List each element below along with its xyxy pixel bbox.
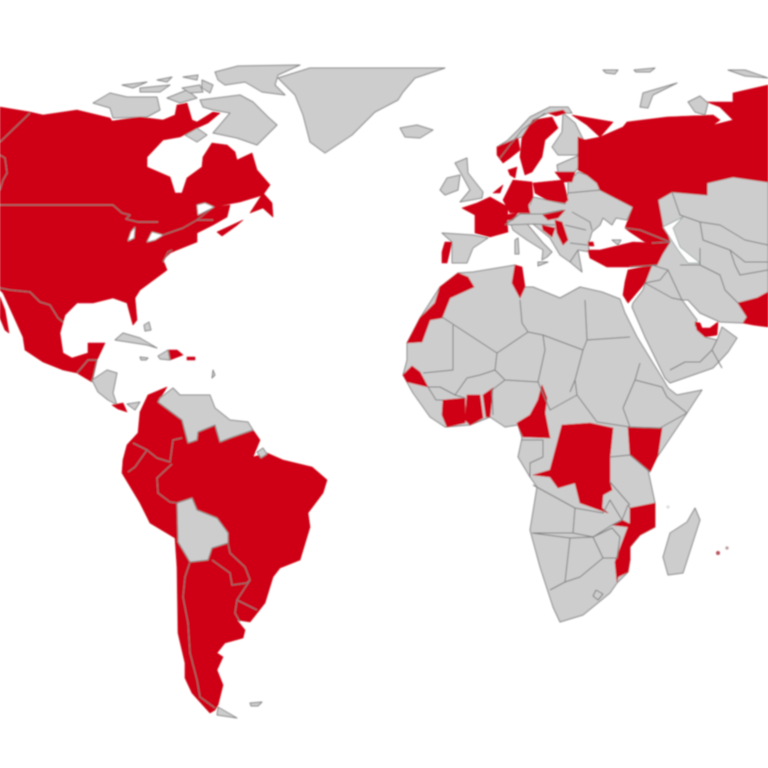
- North America internal borders: [0, 113, 213, 382]
- Eurasian borders: [500, 113, 768, 370]
- South American borders: [128, 438, 257, 708]
- Africa grey landmass: [403, 265, 702, 622]
- Africa red countries: [403, 265, 662, 582]
- red South American countries: [112, 387, 327, 713]
- African borders: [423, 300, 687, 600]
- Caspian Sea: [663, 217, 700, 263]
- North America: Canada, USA, Mexico: [0, 103, 273, 382]
- South America: [112, 387, 327, 718]
- Bolivia, Venezuela, Guianas: [158, 388, 267, 718]
- Eurasia red countries: [442, 85, 768, 337]
- Africa: [403, 265, 729, 622]
- Eurasia grey landmass: [440, 107, 768, 383]
- Great Lakes and small water: [128, 203, 214, 242]
- Central America and Caribbean: [92, 322, 215, 410]
- island dots: [666, 505, 729, 555]
- Greenland and Arctic islands: [93, 65, 768, 153]
